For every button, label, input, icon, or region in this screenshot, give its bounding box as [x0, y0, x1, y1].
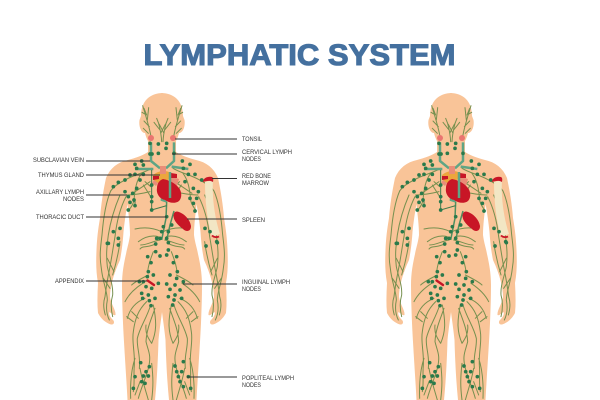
label: inguinal lymph nodes: NODES	[242, 286, 261, 293]
label: subclavian vein	[33, 157, 150, 164]
label: thymus gland	[38, 172, 160, 179]
label: subclavian vein: SUBCLAVIAN VEIN	[33, 157, 84, 164]
label: popliteal lymph nodes: POPLITEAL LYMPH	[242, 375, 294, 382]
label: cervical lymph nodes: NODES	[242, 156, 261, 163]
label: spleen	[187, 217, 265, 224]
label: red bone marrow: RED BONE	[242, 173, 271, 180]
label: appendix: APPENDIX	[55, 278, 84, 285]
label: inguinal lymph nodes	[183, 279, 290, 293]
label: red bone marrow: MARROW	[242, 180, 269, 187]
left body figure with lymphatic system	[96, 93, 228, 400]
label: tonsil	[175, 136, 262, 143]
label: thoracic duct: THORACIC DUCT	[36, 214, 84, 221]
label: thoracic duct	[36, 214, 167, 221]
label: tonsil: TONSIL	[242, 136, 262, 143]
label: axillary lymph nodes: NODES	[63, 196, 84, 203]
right body figure with lymphatic system	[385, 93, 517, 400]
title: LYMPHATIC SYSTEM	[144, 39, 456, 72]
label: popliteal lymph nodes: NODES	[242, 382, 261, 389]
label: popliteal lymph nodes	[187, 375, 294, 389]
label: inguinal lymph nodes: INGUINAL LYMPH	[242, 279, 290, 286]
label: thymus gland: THYMUS GLAND	[38, 172, 84, 179]
label: cervical lymph nodes: CERVICAL LYMPH	[242, 149, 292, 156]
label: axillary lymph nodes	[36, 189, 127, 203]
label: red bone marrow	[212, 173, 271, 187]
label: appendix	[55, 278, 147, 285]
label: axillary lymph nodes: AXILLARY LYMPH	[36, 189, 84, 196]
label: spleen: SPLEEN	[242, 217, 265, 224]
label: cervical lymph nodes	[172, 149, 292, 163]
